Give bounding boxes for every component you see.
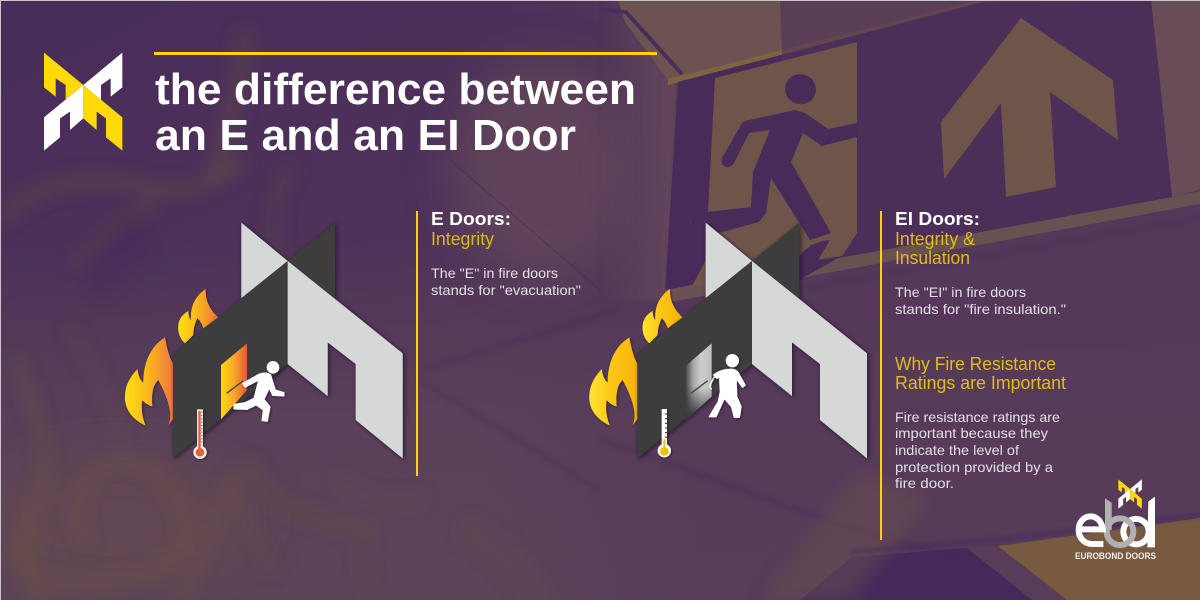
- text: E doors: stands for "evacuation": [431, 282, 581, 298]
- floor and lower wall: [998, 518, 1200, 600]
- text: why ratings matter: [895, 354, 1066, 491]
- sign board: [665, 0, 1172, 290]
- sign arrow: [941, 18, 1118, 197]
- text: why ratings matter: Ratings are Important: [895, 373, 1066, 393]
- flames: E door: [125, 289, 218, 426]
- walls: [173, 223, 403, 458]
- Eurobond Doors logo: [1075, 479, 1156, 562]
- E door illustration: [125, 223, 403, 459]
- text: why ratings matter: important because they: [895, 425, 1048, 441]
- flames: EI door: [589, 289, 683, 426]
- door: [221, 343, 247, 419]
- text: E doors: E Doors:: [431, 209, 511, 229]
- title: an E and an EI Door: [155, 111, 576, 160]
- text: EI doors: [895, 209, 1066, 317]
- text: why ratings matter: fire door.: [895, 475, 954, 491]
- divider: EI doors: [880, 211, 882, 540]
- thermometer: hot: [193, 409, 207, 459]
- ceiling above sign: [618, 0, 985, 80]
- divider: E doors: [416, 211, 418, 476]
- Eurobond Doors logo: EUROBOND DOORS: [1075, 551, 1156, 562]
- thermometer: cool: [658, 409, 671, 457]
- text: why ratings matter: Fire resistance ratings are: [895, 409, 1060, 425]
- wall strip under sign: [665, 191, 1200, 303]
- title rule: [154, 52, 657, 55]
- logo mark: [44, 53, 122, 151]
- insulated door: [685, 343, 712, 420]
- sign running man: [682, 70, 857, 285]
- text: E doors: Integrity: [431, 229, 494, 249]
- walls around sign: [600, 0, 680, 300]
- text: why ratings matter: Why Fire Resistance: [895, 354, 1056, 374]
- text: why ratings matter: protection provided by a: [895, 459, 1053, 475]
- text: EI doors: The "EI" in fire doors: [895, 284, 1026, 300]
- text: why ratings matter: indicate the level of: [895, 442, 1019, 458]
- text: EI doors: Insulation: [895, 248, 970, 268]
- text: E doors: The "E" in fire doors: [431, 265, 558, 281]
- EI door illustration: [589, 223, 867, 458]
- sign rail: [668, 0, 990, 85]
- title: [155, 65, 636, 160]
- text: E doors: [431, 209, 581, 298]
- walls: [637, 223, 867, 458]
- text: EI doors: Integrity &: [895, 229, 975, 249]
- sign door panel: [682, 42, 857, 286]
- running person: [234, 361, 284, 421]
- title: the difference between: [155, 65, 636, 114]
- walking person: [709, 354, 745, 417]
- text: EI doors: EI Doors:: [895, 209, 980, 229]
- text: EI doors: stands for "fire insulation.": [895, 301, 1066, 317]
